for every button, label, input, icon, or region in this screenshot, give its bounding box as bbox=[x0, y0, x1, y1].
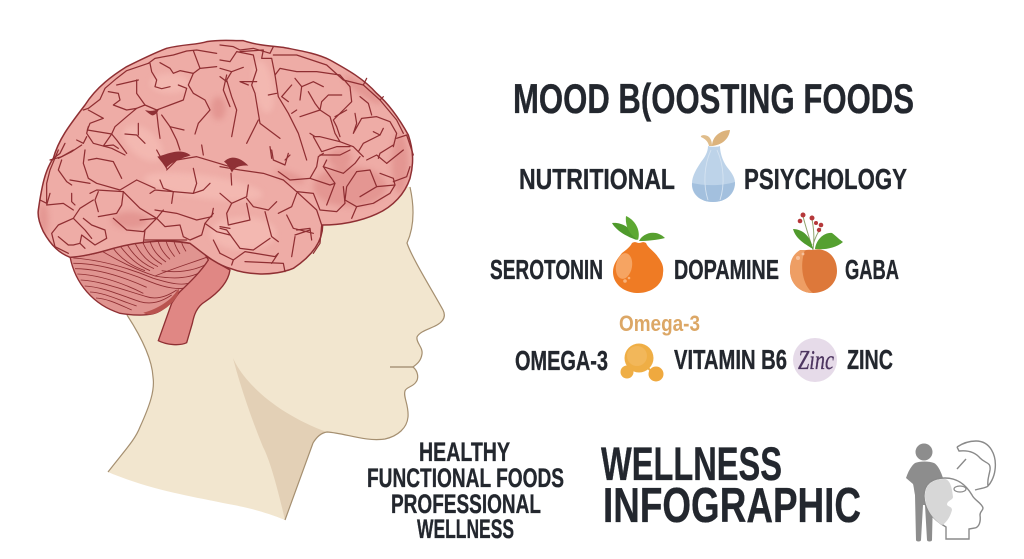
heading: wellness infographic: INFOGRAPHIC bbox=[603, 479, 861, 533]
dark cerebellum underside bbox=[143, 288, 179, 315]
brain outline bbox=[38, 40, 413, 274]
cerebrum bbox=[38, 40, 413, 274]
label: dopamine: DOPAMINE bbox=[674, 254, 779, 285]
dark fissure gaps bbox=[145, 109, 248, 173]
heading: wellness infographic: WELLNESS bbox=[601, 437, 782, 490]
cerebellum bbox=[70, 241, 208, 315]
icon: blue pear vase bbox=[692, 130, 735, 202]
icon: orange with leaves bbox=[612, 216, 665, 293]
text block: healthy functional foods professional wellness: HEALTHY bbox=[419, 437, 510, 467]
lower head profile bbox=[924, 478, 983, 539]
brain sulci lines bbox=[40, 45, 413, 272]
label: omega-3: OMEGA-3 bbox=[515, 345, 608, 376]
person figure bbox=[906, 444, 943, 542]
head outline bbox=[285, 187, 444, 520]
heading: wellness infographic bbox=[601, 437, 861, 533]
shaded brain area bbox=[925, 479, 953, 525]
upper right quadrant bbox=[220, 45, 413, 160]
upper left quadrant bbox=[53, 50, 230, 158]
back of neck outline bbox=[108, 315, 153, 472]
text block: healthy functional foods professional wellness: FUNCTIONAL FOODS bbox=[367, 463, 564, 493]
icon: zinc badge bbox=[793, 338, 837, 382]
icon: person and head profiles bbox=[906, 441, 995, 542]
brain illustration bbox=[38, 40, 413, 345]
text block: healthy functional foods professional wellness bbox=[367, 437, 564, 544]
label: vitamin b6: VITAMIN B6 bbox=[674, 344, 787, 375]
neck shadow bbox=[233, 358, 327, 520]
label: gaba: GABA bbox=[845, 254, 899, 285]
head silhouette bbox=[108, 180, 444, 520]
icon: zinc badge: Zinc bbox=[798, 345, 834, 375]
label: serotonin: SEROTONIN bbox=[490, 254, 603, 285]
label: omega-3 caption: Omega-3 bbox=[619, 311, 700, 336]
icon: peach with leaves and berries bbox=[790, 212, 843, 293]
lower left quadrant bbox=[40, 150, 230, 253]
label: nutritional: NUTRITIONAL bbox=[519, 164, 675, 196]
brainstem bbox=[158, 257, 230, 345]
shading blobs bbox=[38, 59, 408, 250]
mouth line bbox=[390, 366, 413, 368]
label: zinc: ZINC bbox=[847, 344, 893, 375]
label: psychology: PSIYCHOLOGY bbox=[744, 164, 907, 196]
icon: omega-3 droplets bbox=[620, 344, 664, 382]
text block: healthy functional foods professional wellness: PROFESSIONAL bbox=[391, 489, 541, 519]
text block: healthy functional foods professional wellness: WELLNESS bbox=[417, 514, 514, 544]
lower right quadrant bbox=[220, 150, 410, 272]
upper head outline bbox=[957, 441, 995, 490]
